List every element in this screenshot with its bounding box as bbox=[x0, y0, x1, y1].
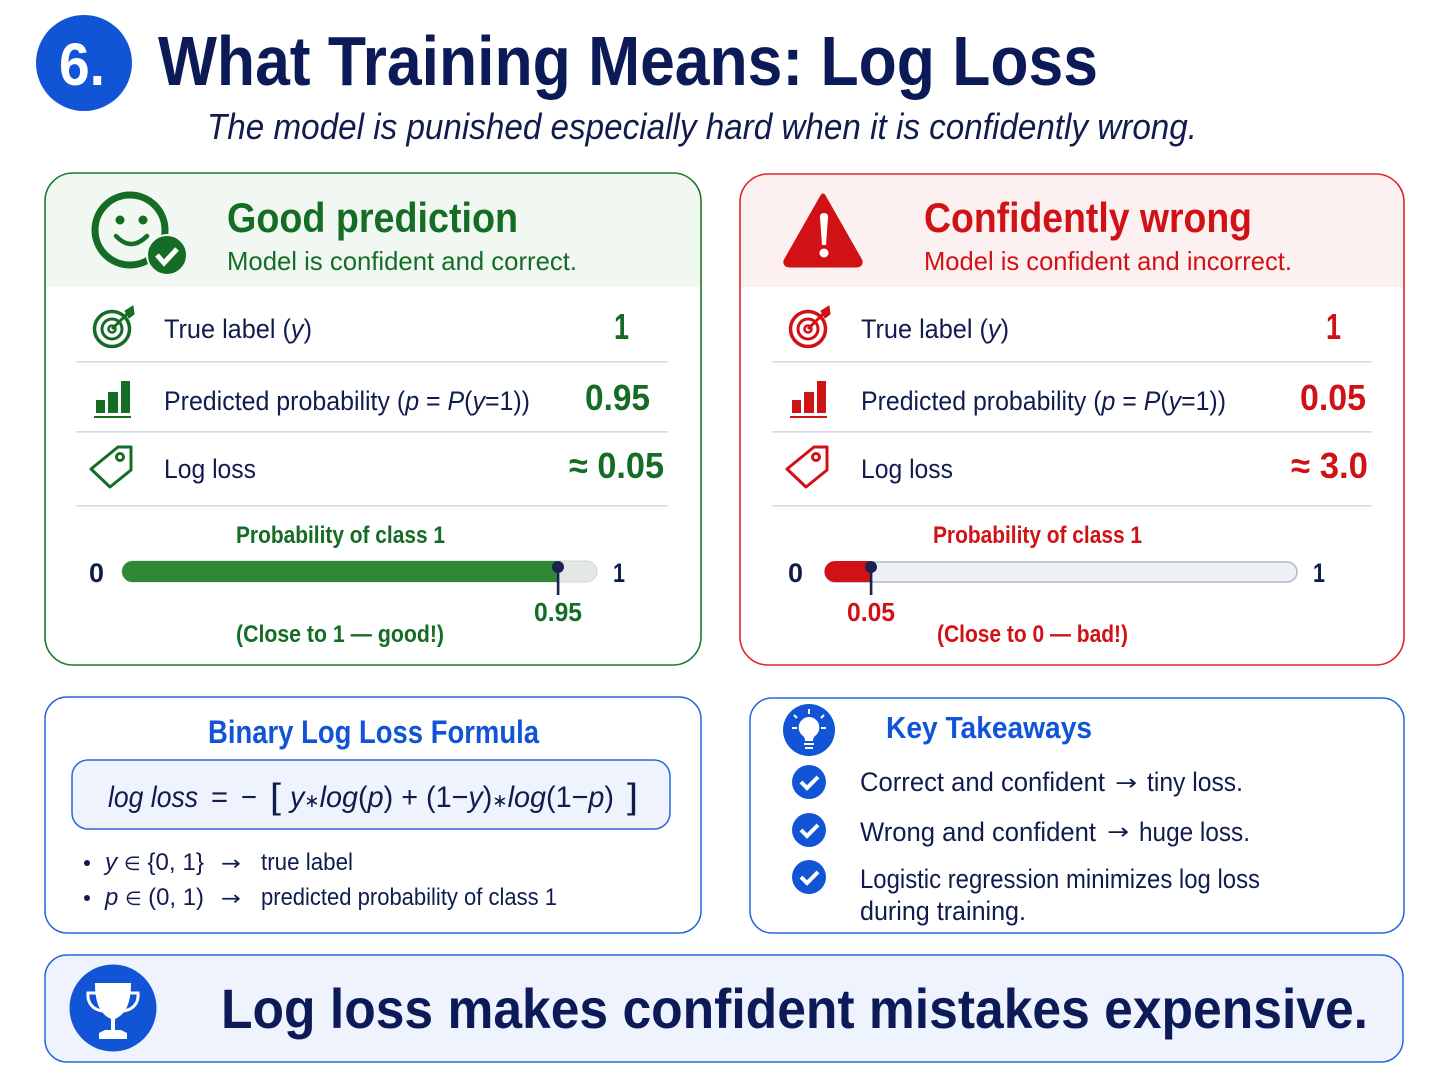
takeaway 3: during training. bbox=[860, 896, 1026, 926]
row: predicted probability: Predicted probability (p = P(y=1)) bbox=[861, 386, 1226, 416]
chart: wrong probability bar: 1 bbox=[1313, 558, 1325, 588]
row: predicted probability: 0.05 bbox=[1300, 377, 1366, 418]
takeaway 3: Logistic regression minimizes log loss bbox=[860, 864, 1260, 894]
section number badge bbox=[36, 15, 132, 111]
subtitle: The model is punished especially hard when it is confidently wrong. bbox=[207, 106, 1197, 147]
panel: key takeaways bbox=[750, 698, 1404, 933]
row: true label bbox=[790, 306, 1341, 347]
definition: p: → bbox=[221, 886, 241, 910]
takeaway 3 bbox=[792, 860, 1260, 926]
row: predicted probability bbox=[94, 377, 650, 418]
icon: target bbox=[94, 306, 134, 346]
chart: good probability bar: 0 bbox=[89, 558, 104, 588]
heading: good prediction: Good prediction bbox=[227, 194, 518, 241]
icon: bars bbox=[790, 381, 827, 418]
chart: wrong probability bar: Probability of class 1 bbox=[933, 522, 1142, 549]
panel: bottom banner bbox=[45, 955, 1403, 1062]
row: predicted probability: Predicted probability (p = P(y=1)) bbox=[164, 386, 530, 416]
formula box: − bbox=[241, 781, 257, 814]
icon: tag bbox=[91, 447, 131, 487]
chart: good probability bar: 1 bbox=[613, 558, 625, 588]
definition: y: → bbox=[221, 851, 241, 875]
row: predicted probability: 0.95 bbox=[585, 377, 650, 418]
row: log loss bbox=[787, 445, 1368, 487]
heading: formula: Binary Log Loss Formula bbox=[208, 714, 539, 750]
icon: light bulb bbox=[783, 704, 835, 756]
formula box: y∗log(p) + (1−y)∗log(1−p) bbox=[288, 781, 614, 814]
chart: wrong probability bar bbox=[788, 522, 1325, 648]
icon: bars bbox=[94, 381, 131, 418]
takeaway 1: → bbox=[1115, 771, 1137, 796]
icon: trophy bbox=[70, 964, 156, 1052]
takeaway 2: huge loss. bbox=[1139, 817, 1250, 847]
icon: tag bbox=[787, 447, 827, 487]
formula box: [ bbox=[270, 777, 281, 816]
chart: wrong probability bar: (Close to 0 — bad!) bbox=[937, 621, 1128, 648]
icon: smiley with check bbox=[95, 195, 187, 275]
chart: good probability bar: 0.95 bbox=[534, 597, 582, 627]
title: What Training Means: Log Loss bbox=[158, 22, 1098, 100]
formula box: log loss bbox=[108, 781, 198, 814]
definition: y: y ∈ {0, 1} bbox=[103, 849, 204, 876]
row: true label bbox=[94, 306, 629, 347]
definition: y bbox=[84, 849, 353, 876]
formula box bbox=[72, 760, 670, 829]
row: log loss: ≈ 0.05 bbox=[569, 445, 664, 486]
formula box: ] bbox=[627, 777, 638, 816]
row: predicted probability bbox=[790, 377, 1366, 418]
takeaway 2: → bbox=[1107, 820, 1129, 845]
takeaway 1: tiny loss. bbox=[1147, 767, 1243, 797]
definition: y: true label bbox=[261, 849, 353, 876]
heading: confidently wrong: Confidently wrong bbox=[924, 194, 1252, 241]
definition: p: predicted probability of class 1 bbox=[261, 884, 557, 911]
takeaway 2: Wrong and confident bbox=[860, 817, 1096, 847]
row: true label: 1 bbox=[614, 306, 629, 347]
chart: good probability bar: Probability of class 1 bbox=[236, 522, 445, 549]
takeaway 1 bbox=[792, 765, 1243, 799]
row: log loss bbox=[91, 445, 664, 487]
definition: p: p ∈ (0, 1) bbox=[104, 884, 204, 911]
chart: wrong probability bar: 0 bbox=[788, 558, 803, 588]
row: true label: True label (y) bbox=[164, 314, 312, 344]
text: good subtitle: Model is confident and correct. bbox=[227, 246, 577, 276]
takeaway 1: Correct and confident bbox=[860, 767, 1105, 797]
chart: good probability bar: (Close to 1 — good!) bbox=[236, 621, 444, 648]
banner text: Log loss makes confident mistakes expensive. bbox=[221, 977, 1368, 1040]
takeaway 2 bbox=[792, 813, 1250, 847]
row: log loss: Log loss bbox=[164, 454, 256, 484]
row: log loss: ≈ 3.0 bbox=[1291, 445, 1368, 486]
panel: binary log loss formula bbox=[45, 697, 701, 933]
definition: p bbox=[84, 884, 557, 911]
row: true label: 1 bbox=[1326, 306, 1341, 347]
chart: wrong probability bar: 0.05 bbox=[847, 597, 895, 627]
icon: target bbox=[790, 306, 830, 346]
chart: good probability bar bbox=[89, 522, 625, 648]
row: true label: True label (y) bbox=[861, 314, 1009, 344]
row: log loss: Log loss bbox=[861, 454, 953, 484]
section number badge: 6. bbox=[59, 31, 105, 98]
icon: warning triangle bbox=[786, 196, 860, 265]
text: wrong subtitle: Model is confident and incorrect. bbox=[924, 246, 1292, 276]
formula box: = bbox=[211, 781, 228, 814]
panel: good prediction bbox=[45, 173, 701, 665]
heading: key takeaways: Key Takeaways bbox=[886, 710, 1092, 745]
panel: confidently wrong bbox=[740, 174, 1404, 665]
